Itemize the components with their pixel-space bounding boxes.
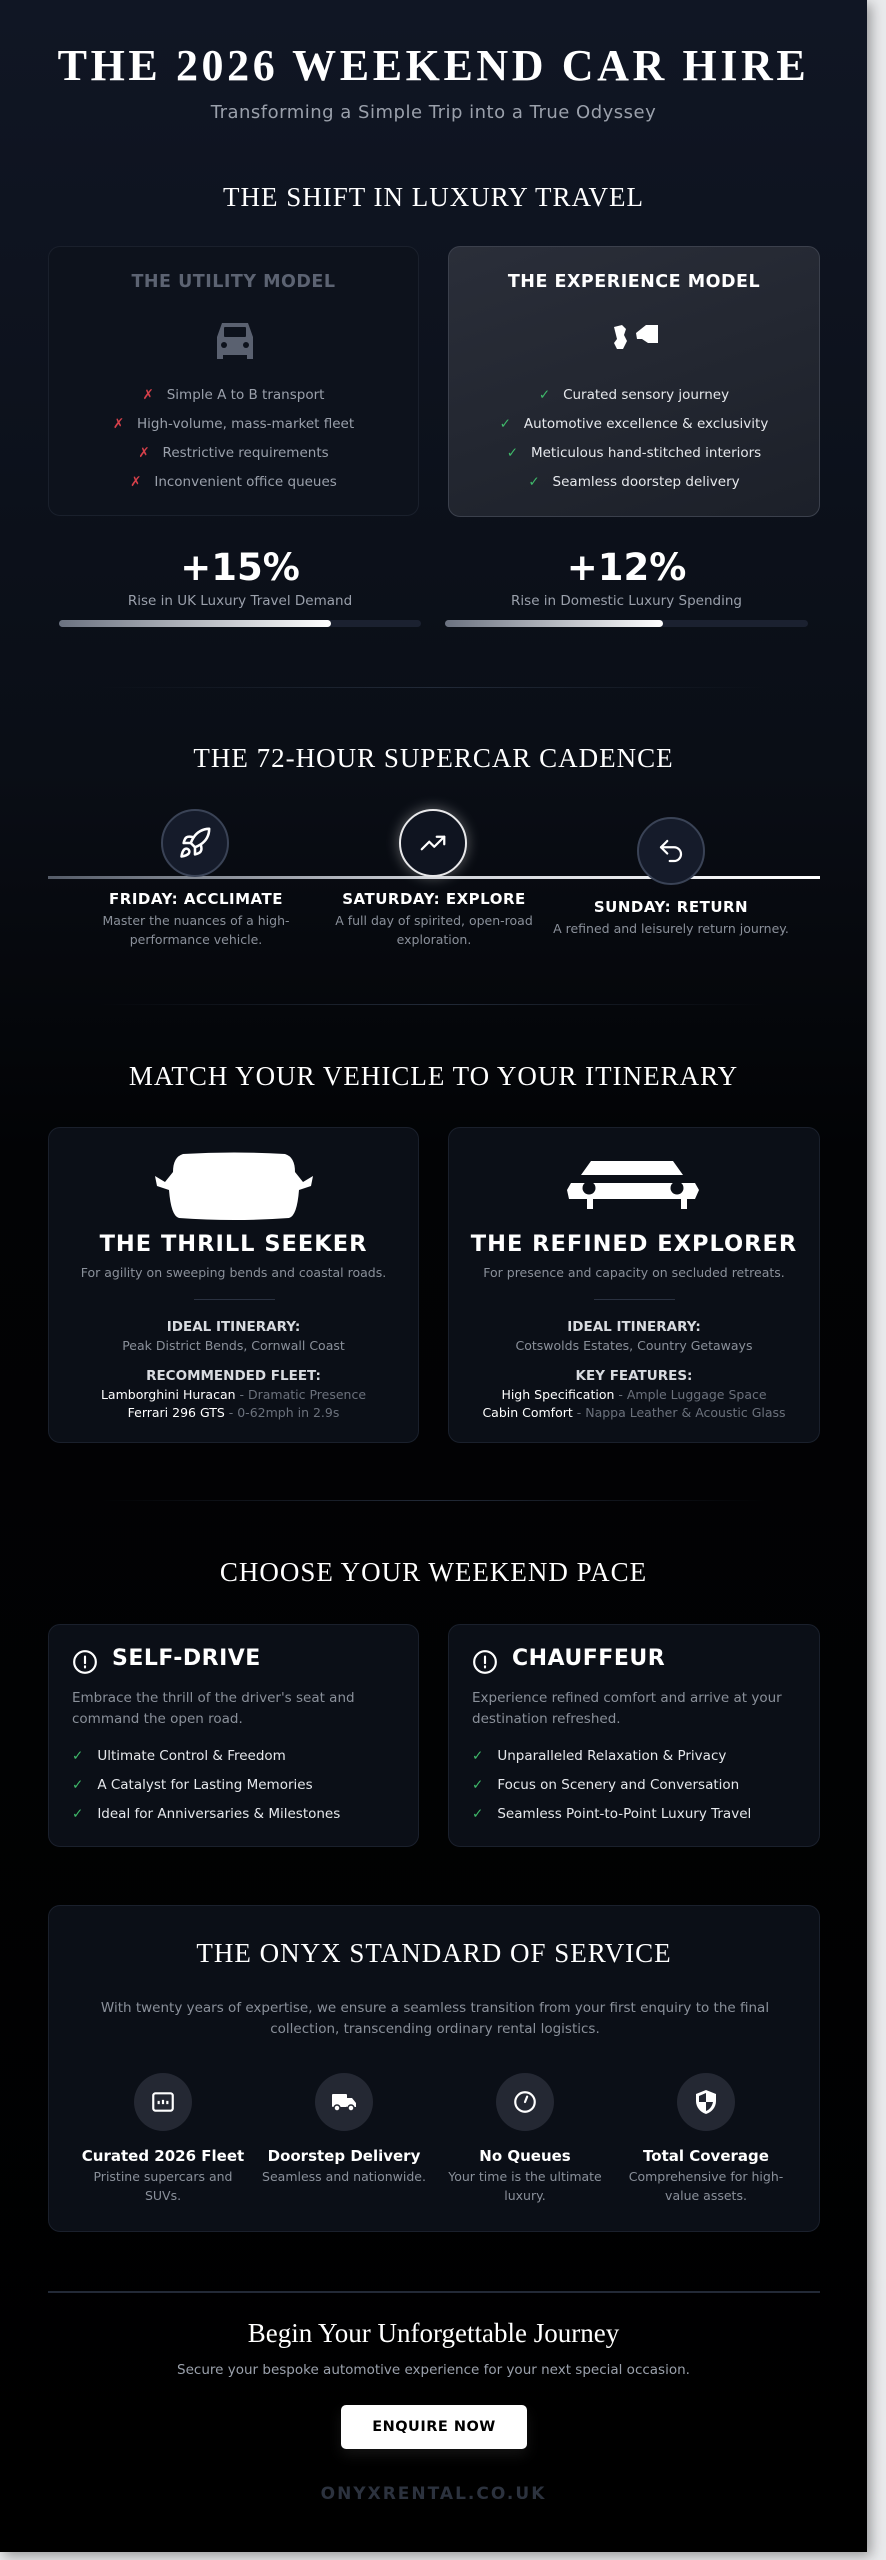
feature: curated fleet: SUVs. <box>145 2188 181 2203</box>
panel: refined explorer: For presence and capacity on secluded retreats. <box>483 1265 785 1280</box>
panel: self-drive: SELF-DRIVE <box>112 1646 261 1671</box>
icon: saturday trend <box>399 809 467 877</box>
heading: 72-hour cadence: THE 72-HOUR SUPERCAR CADENCE <box>193 743 674 773</box>
heading: shift in luxury travel: THE SHIFT IN LUXURY TRAVEL <box>223 182 644 212</box>
feature: curated fleet: Pristine supercars and <box>93 2169 232 2184</box>
heading: weekend pace: CHOOSE YOUR WEEKEND PACE <box>220 1557 647 1587</box>
panel: refined explorer: Cotswolds Estates, Country Getaways <box>516 1338 752 1353</box>
icon: friday rocket <box>161 809 229 877</box>
feature: total coverage <box>629 2073 783 2203</box>
feature: no queues: luxury. <box>504 2188 546 2203</box>
heading: match vehicle: MATCH YOUR VEHICLE TO YOUR ITINERARY <box>129 1061 738 1091</box>
list: utility drawbacks: ✗ Restrictive requirements <box>138 445 329 461</box>
step: saturday: A full day of spirited, open-road <box>335 913 533 928</box>
step: friday: performance vehicle. <box>130 932 262 947</box>
stat: +12%: +12% <box>567 546 686 589</box>
icon: supercar <box>155 1152 313 1220</box>
stat: +15%: Rise in UK Luxury Travel Demand <box>128 593 352 609</box>
timeline <box>48 801 820 885</box>
step: friday: FRIDAY: ACCLIMATE <box>109 890 283 908</box>
panel: self-drive: ✓ A Catalyst for Lasting Memories <box>72 1777 313 1793</box>
panel: chauffeur: Experience refined comfort and arrive at your destination refreshed. <box>472 1690 782 1727</box>
panel: refined explorer: High Specification - Ample Luggage Space <box>501 1387 767 1402</box>
feature: doorstep delivery <box>262 2073 426 2184</box>
panel: self-drive: ✓ Ultimate Control & Freedom <box>72 1748 286 1764</box>
step: sunday: SUNDAY: RETURN <box>594 898 748 916</box>
panel: chauffeur: CHAUFFEUR <box>512 1646 665 1671</box>
feature: curated fleet <box>82 2073 244 2203</box>
list: utility drawbacks: ✗ Simple A to B transport <box>143 387 324 403</box>
step: sunday: A refined and leisurely return journey. <box>553 921 789 936</box>
heading: begin journey: Begin Your Unforgettable Journey <box>248 2318 619 2348</box>
feature: doorstep delivery: Seamless and nationwide. <box>262 2169 426 2184</box>
title: THE 2026 WEEKEND CAR HIRE <box>58 41 809 90</box>
step: sunday <box>553 898 789 936</box>
icon: alert circle <box>473 1650 497 1674</box>
panel: onyx standard <box>48 1905 820 2232</box>
footer: website: ONYXRENTAL.CO.UK <box>321 2484 546 2504</box>
stat: +12% <box>445 546 808 627</box>
step: friday: Master the nuances of a high- <box>102 913 290 928</box>
panel: experience model <box>448 246 820 517</box>
list: experience benefits: ✓ Automotive excellence & exclusivity <box>500 416 768 432</box>
panel: utility model <box>48 246 419 516</box>
list: experience benefits: ✓ Seamless doorstep delivery <box>528 474 740 490</box>
list: utility drawbacks: ✗ High-volume, mass-market fleet <box>113 416 354 432</box>
panel: onyx standard: With twenty years of expertise, we ensure a seamless transition from your first enquiry to the final collection, transcending ordinary rental logistics. <box>101 2000 769 2037</box>
feature: total coverage: value assets. <box>665 2188 747 2203</box>
stat: +12%: Rise in Domestic Luxury Spending <box>511 593 742 609</box>
step: saturday: exploration. <box>397 932 471 947</box>
card title: refined explorer: THE REFINED EXPLORER <box>471 1231 797 1257</box>
panel: chauffeur: ✓ Focus on Scenery and Conversation <box>472 1777 739 1793</box>
icon: suv <box>567 1161 699 1209</box>
text: cta subline: Secure your bespoke automotive experience for your next special occasion. <box>177 2362 690 2378</box>
list: experience benefits: ✓ Meticulous hand-stitched interiors <box>507 445 761 461</box>
list: experience benefits <box>500 387 768 490</box>
icon: handshake <box>614 325 658 349</box>
list: experience benefits: ✓ Curated sensory journey <box>539 387 729 403</box>
list: utility drawbacks <box>113 387 354 490</box>
panel: refined explorer <box>448 1127 820 1443</box>
panel: thrill seeker: RECOMMENDED FLEET: <box>146 1368 321 1384</box>
icon: car <box>217 323 253 359</box>
stat: +15%: +15% <box>180 546 300 589</box>
feature: no queues <box>448 2073 602 2203</box>
list: utility drawbacks: ✗ Inconvenient office queues <box>130 474 337 490</box>
timeline line <box>48 876 820 879</box>
feature: no queues: Your time is the ultimate <box>448 2169 602 2184</box>
card title: experience: THE EXPERIENCE MODEL <box>508 272 760 292</box>
panel: chauffeur <box>448 1624 820 1847</box>
step: saturday <box>335 890 533 947</box>
heading: onyx standard: THE ONYX STANDARD OF SERVICE <box>196 1938 672 1968</box>
feature: curated fleet: Curated 2026 Fleet <box>82 2147 244 2165</box>
panel: chauffeur: ✓ Seamless Point-to-Point Luxury Travel <box>472 1806 751 1822</box>
card title: utility: THE UTILITY MODEL <box>131 272 336 292</box>
feature: total coverage: Comprehensive for high- <box>629 2169 783 2184</box>
subtitle: Transforming a Simple Trip into a True Odyssey <box>211 102 656 123</box>
feature: doorstep delivery: Doorstep Delivery <box>268 2147 420 2165</box>
button: enquire now <box>341 2405 527 2449</box>
panel: thrill seeker: For agility on sweeping bends and coastal roads. <box>81 1265 386 1280</box>
step: friday <box>102 890 290 947</box>
panel: self-drive <box>48 1624 419 1847</box>
panel: self-drive: ✓ Ideal for Anniversaries & Milestones <box>72 1806 340 1822</box>
button: enquire now: ENQUIRE NOW <box>372 2419 496 2435</box>
panel: self-drive: Embrace the thrill of the driver's seat and command the open road. <box>72 1690 355 1727</box>
panel: thrill seeker <box>48 1127 419 1443</box>
panel: refined explorer: KEY FEATURES: <box>576 1368 692 1384</box>
icon: alert circle <box>73 1650 97 1674</box>
panel: thrill seeker: Ferrari 296 GTS - 0-62mph in 2.9s <box>128 1405 339 1420</box>
panel: thrill seeker: Peak District Bends, Cornwall Coast <box>122 1338 345 1353</box>
step: saturday: SATURDAY: EXPLORE <box>342 890 526 908</box>
panel: refined explorer: IDEAL ITINERARY: <box>567 1319 701 1335</box>
panel: thrill seeker: Lamborghini Huracan - Dramatic Presence <box>101 1387 366 1402</box>
panel: chauffeur: ✓ Unparalleled Relaxation & Privacy <box>472 1748 726 1764</box>
feature: total coverage: Total Coverage <box>643 2147 769 2165</box>
panel: thrill seeker: IDEAL ITINERARY: <box>167 1319 300 1335</box>
panel: refined explorer: Cabin Comfort - Nappa Leather & Acoustic Glass <box>482 1405 786 1420</box>
bar: 12% <box>445 620 808 627</box>
icon: sunday return <box>637 817 705 885</box>
feature: no queues: No Queues <box>479 2147 571 2165</box>
bar: 15% <box>59 620 421 627</box>
stat: +15% <box>59 546 421 627</box>
card title: thrill seeker: THE THRILL SEEKER <box>100 1231 367 1257</box>
